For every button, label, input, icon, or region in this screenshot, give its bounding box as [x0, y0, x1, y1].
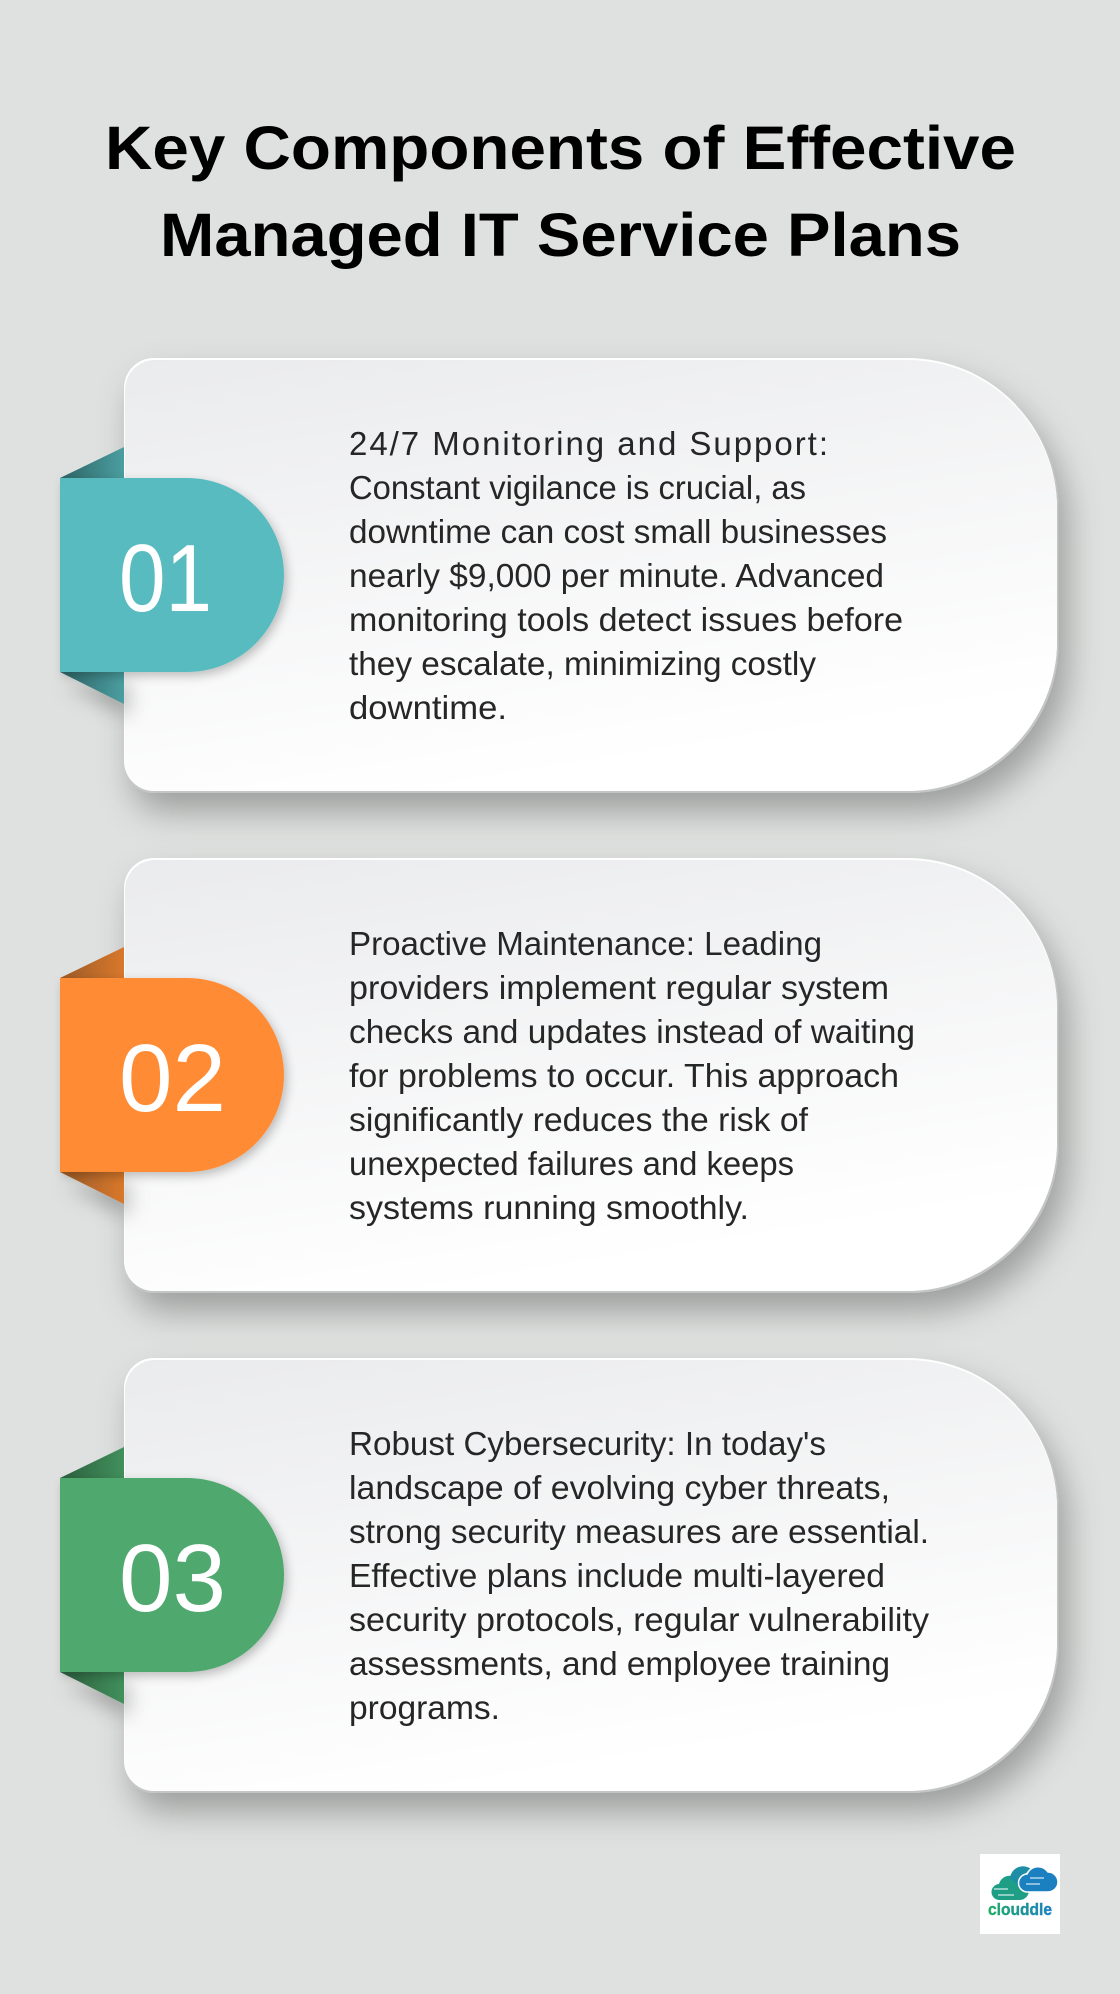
- number tab 02: 02: [119, 1025, 226, 1132]
- text block 02: Proactive Maintenance: Leading: [349, 925, 822, 962]
- text block 02: unexpected failures and keeps: [349, 1145, 794, 1182]
- ribbon folds 02: [60, 947, 124, 1204]
- text block 01: they escalate, minimizing costly: [349, 645, 816, 682]
- text block 01: downtime.: [349, 689, 507, 726]
- text block 03: assessments, and employee training: [349, 1645, 890, 1682]
- title: Managed IT Service Plans: [160, 201, 961, 269]
- number tab 02: [60, 978, 284, 1172]
- card 02 shape: [124, 858, 1059, 1293]
- text block 03: Robust Cybersecurity: In today's: [349, 1425, 826, 1462]
- text block 01: nearly $9,000 per minute. Advanced: [349, 557, 884, 594]
- text block 02: for problems to occur. This approach: [349, 1057, 899, 1094]
- text block 01: downtime can cost small businesses: [349, 513, 887, 550]
- panel: step 02: [60, 858, 1059, 1293]
- text block 03: security protocols, regular vulnerability: [349, 1601, 930, 1638]
- number tab 03: 03: [119, 1525, 226, 1632]
- text block 03: Effective plans include multi-layered: [349, 1557, 885, 1594]
- text block 02: significantly reduces the risk of: [349, 1101, 809, 1138]
- text block 01: Constant vigilance is crucial, as: [349, 469, 806, 506]
- text block 02: checks and updates instead of waiting: [349, 1013, 915, 1050]
- ribbon folds 01: [60, 447, 124, 704]
- number tab 01: [60, 478, 284, 672]
- icon: clouds: [991, 1866, 1058, 1900]
- text block 01: monitoring tools detect issues before: [349, 601, 903, 638]
- text block 01: [349, 425, 903, 726]
- card 03 shape: [124, 1358, 1059, 1793]
- text block 03: [349, 1425, 930, 1726]
- text block 01: 24/7 Monitoring and Support:: [349, 425, 828, 462]
- panel: step 01: [60, 358, 1059, 793]
- panel: step 03: [60, 1358, 1059, 1793]
- card 01 shape: [124, 358, 1059, 793]
- title: [105, 114, 1016, 269]
- title: Key Components of Effective: [105, 114, 1016, 182]
- text block 03: strong security measures are essential.: [349, 1513, 929, 1550]
- text block 02: providers implement regular system: [349, 969, 889, 1006]
- text block 03: programs.: [349, 1689, 500, 1726]
- logo: clouddle: clouddle: [988, 1900, 1052, 1919]
- number tab 01: 01: [119, 525, 212, 632]
- ribbon folds 03: [60, 1447, 124, 1704]
- text block 02: systems running smoothly.: [349, 1189, 749, 1226]
- logo: clouddle: [980, 1854, 1060, 1934]
- text block 03: landscape of evolving cyber threats,: [349, 1469, 890, 1506]
- text block 02: [349, 925, 915, 1226]
- number tab 03: [60, 1478, 284, 1672]
